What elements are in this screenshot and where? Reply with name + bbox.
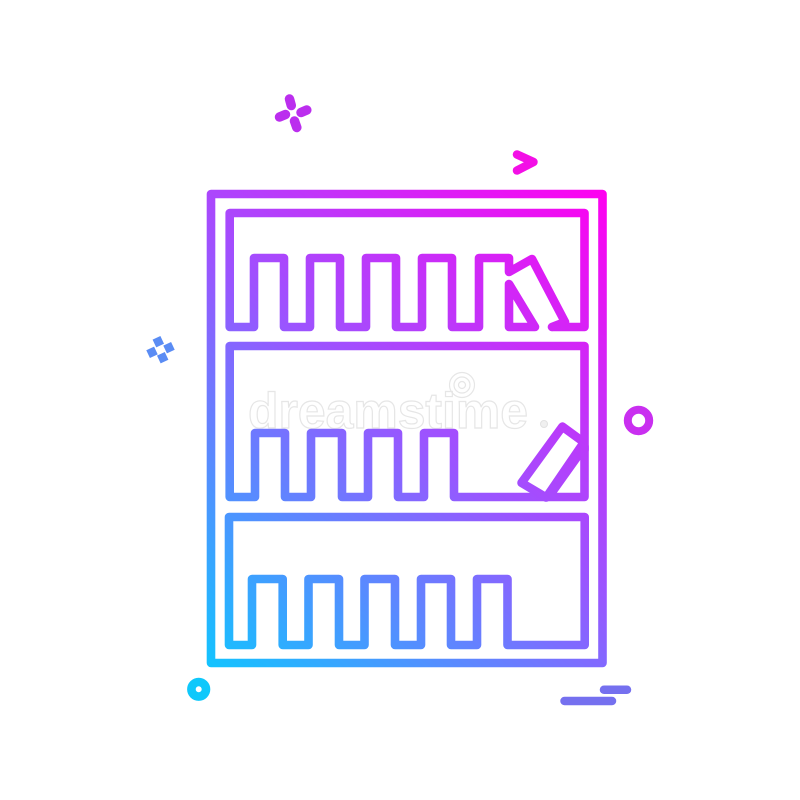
watermark: dreamstime bbox=[248, 383, 528, 439]
icon: ring bottom left bbox=[191, 682, 206, 697]
tilted book: middle shelf bbox=[522, 427, 584, 498]
bookshelf bbox=[211, 194, 602, 663]
icon: four-petal sparkle bbox=[280, 99, 307, 128]
book wedge: middle shelf bbox=[549, 447, 584, 497]
middle shelf with books bbox=[230, 346, 584, 498]
top shelf with books bbox=[230, 213, 584, 327]
leaning book: top shelf bbox=[509, 284, 535, 327]
bookshelf outer frame bbox=[211, 194, 602, 663]
icon: pixel diamond bbox=[146, 336, 175, 363]
icon: chevron arrow bbox=[517, 154, 534, 170]
icon: ring right bbox=[628, 410, 649, 431]
icon: speed lines bbox=[564, 690, 627, 701]
bottom shelf with books bbox=[229, 517, 585, 645]
